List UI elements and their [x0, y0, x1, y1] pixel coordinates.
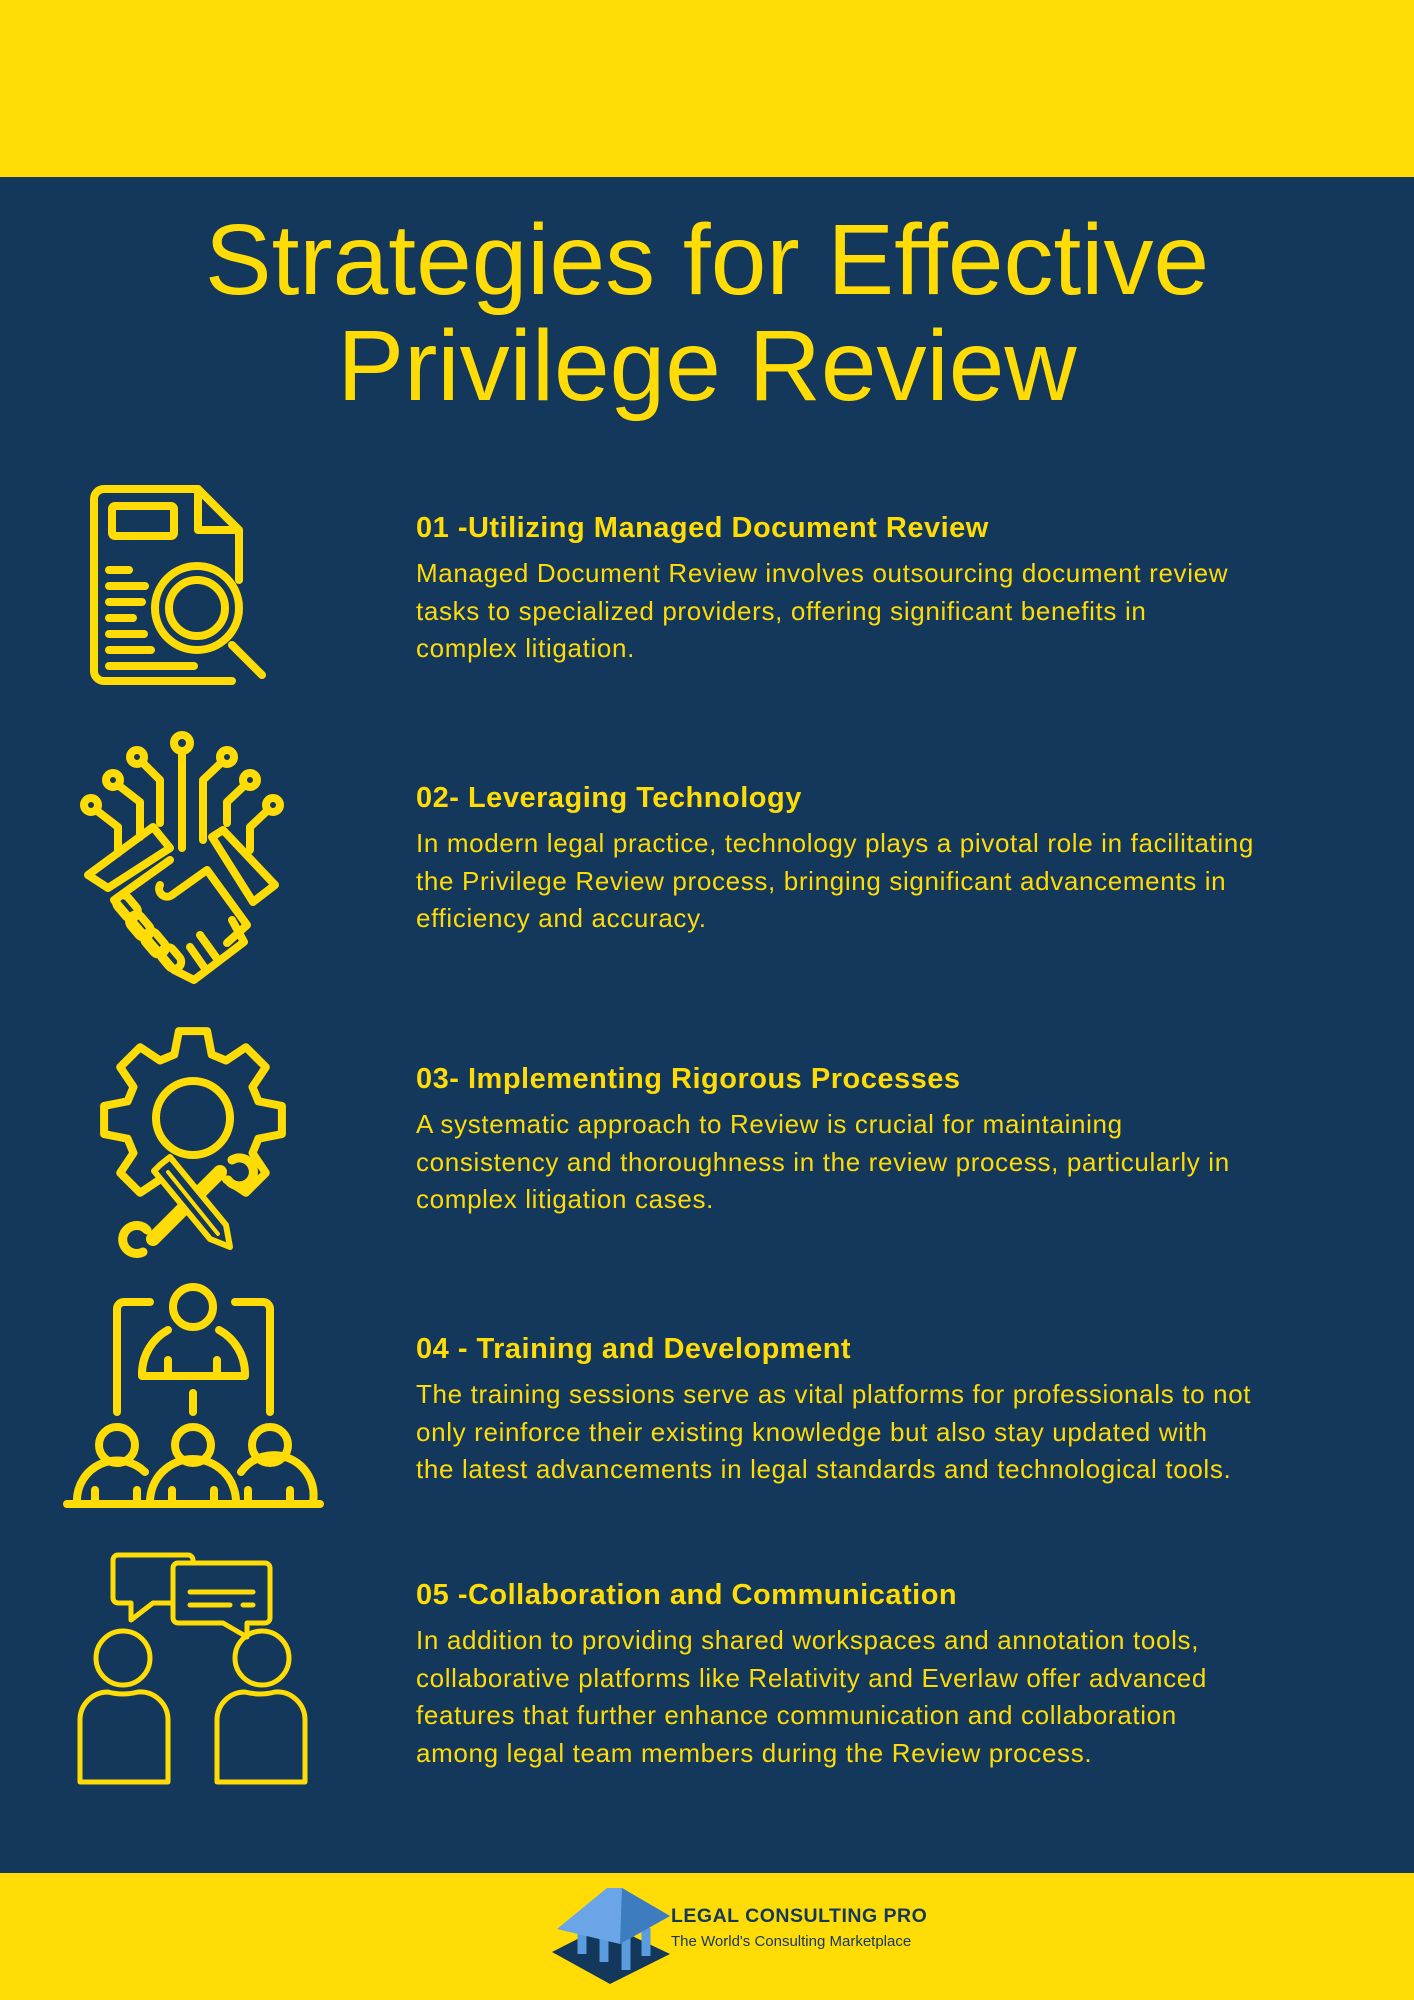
section 05: 05 -Collaboration and Communication: [416, 1579, 957, 1611]
section 05: In addition to providing shared workspaces and annotation tools,: [416, 1625, 1199, 1655]
title: Strategies for Effective: [205, 204, 1209, 316]
section 02: efficiency and accuracy.: [416, 903, 707, 933]
section 05: features that further enhance communication and collaboration: [416, 1700, 1177, 1730]
section 03: A systematic approach to Review is crucial for maintaining: [416, 1109, 1123, 1139]
title: Privilege Review: [337, 310, 1077, 422]
section 01: 01 -Utilizing Managed Document Review: [416, 512, 989, 544]
bottom band: [0, 1873, 1414, 2000]
section 05: among legal team members during the Review process.: [416, 1738, 1092, 1768]
section 03: 03- Implementing Rigorous Processes: [416, 1063, 960, 1095]
icon: gear with tools: [104, 1031, 282, 1253]
section 04: The training sessions serve as vital platforms for professionals to not: [416, 1379, 1251, 1409]
section 02: 02- Leveraging Technology: [416, 782, 802, 814]
section 05: collaborative platforms like Relativity and Everlaw offer advanced: [416, 1662, 1207, 1692]
section 04: the latest advancements in legal standards and technological tools.: [416, 1454, 1231, 1484]
section 04: 04 - Training and Development: [416, 1333, 851, 1365]
top band: [0, 0, 1414, 177]
logo text: LEGAL CONSULTING PRO: [671, 1905, 927, 1927]
section 01: complex litigation.: [416, 633, 635, 663]
icon: collaboration: [80, 1555, 305, 1782]
section 02: the Privilege Review process, bringing significant advancements in: [416, 866, 1226, 896]
icon: tech handshake: [84, 735, 280, 980]
section 04: only reinforce their existing knowledge but also stay updated with: [416, 1416, 1208, 1446]
logo icon: building: [552, 1888, 670, 1984]
section 01: tasks to specialized providers, offering significant benefits in: [416, 596, 1146, 626]
icons: [63, 485, 324, 1784]
section 03: consistency and thoroughness in the review process, particularly in: [416, 1146, 1230, 1176]
section 04: [416, 1333, 1251, 1484]
section 03: complex litigation cases.: [416, 1184, 714, 1214]
icon: document search: [94, 489, 262, 681]
icon: training: [67, 1287, 320, 1504]
section 05: [416, 1579, 1207, 1768]
section 01: [416, 512, 1228, 663]
section 02: [416, 782, 1254, 933]
logo: The World's Consulting Marketplace: [671, 1933, 911, 1950]
title: [205, 204, 1209, 422]
section 02: In modern legal practice, technology plays a pivotal role in facilitating: [416, 828, 1254, 858]
section 01: Managed Document Review involves outsourcing document review: [416, 558, 1228, 588]
logo: [552, 1888, 927, 1984]
section 03: [416, 1063, 1230, 1214]
